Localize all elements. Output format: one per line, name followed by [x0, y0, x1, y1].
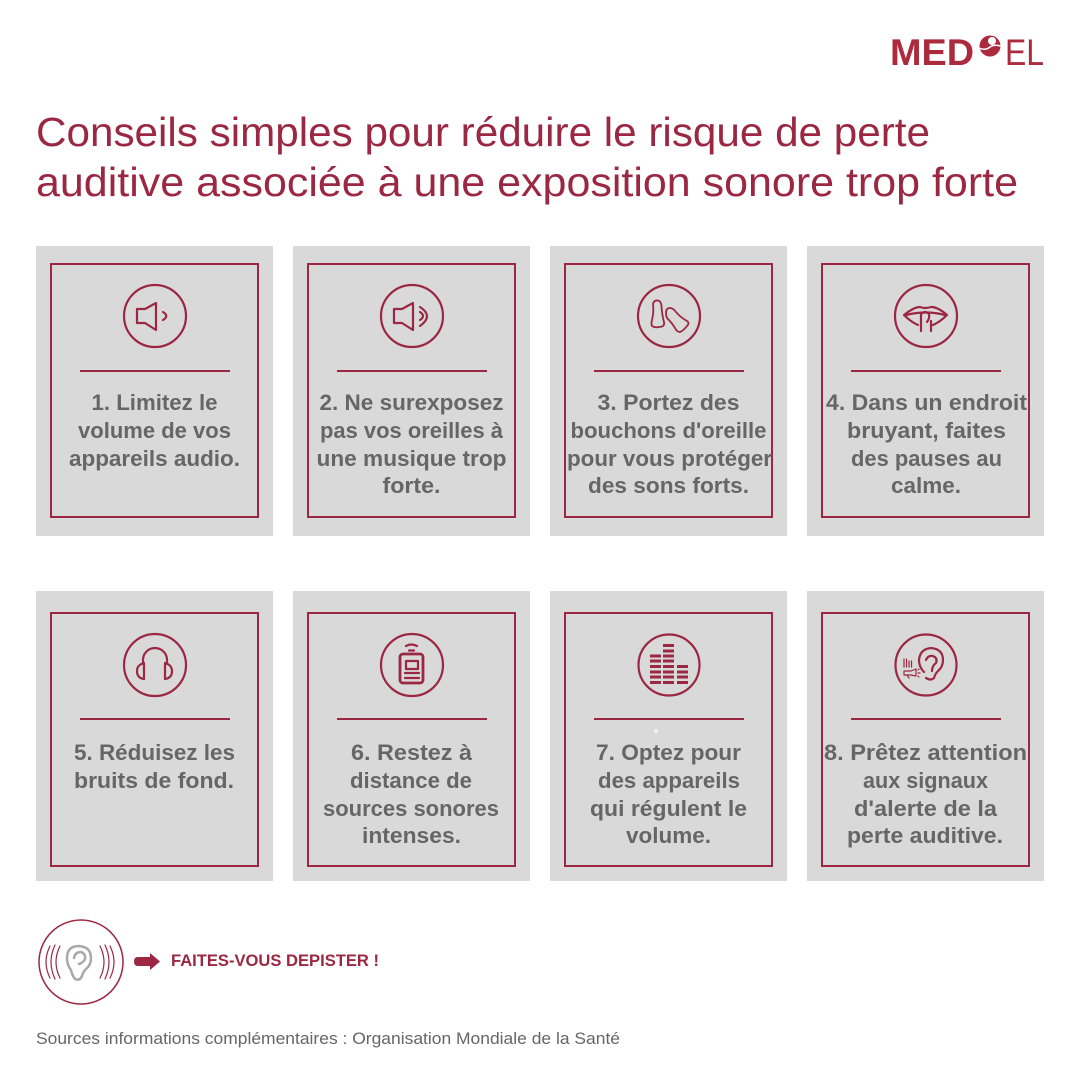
text: tip 3 [567, 390, 772, 498]
icon: ear with sound waves [39, 920, 123, 1004]
text: tip 8: perte auditive. [847, 823, 1003, 848]
text: tip 7 [590, 740, 747, 848]
icon: wireless audio device [381, 634, 443, 696]
arrow [134, 953, 160, 970]
text: tip 8: d'alerte de la [854, 796, 998, 821]
panel: tip 1 [36, 246, 273, 536]
text: tip 6: 6. Restez à [351, 740, 473, 765]
text: tip 3: bouchons d'oreille [570, 418, 766, 443]
text: tip 4 [826, 390, 1028, 498]
text: tip 1: appareils audio. [69, 446, 240, 471]
text: tip 2 [316, 390, 506, 498]
text: tip 2: 2. Ne surexposez [320, 390, 504, 415]
callout: get screened: FAITES-VOUS DEPISTER ! [171, 952, 379, 970]
icon: equalizer [638, 634, 700, 696]
panel: tip 5 [36, 591, 273, 881]
logo: MED-EL [890, 32, 1044, 73]
text: tip 6 [323, 740, 499, 848]
text: tip 2: une musique trop [316, 446, 506, 471]
text: tip 3: pour vous protéger [567, 446, 772, 471]
icon: ear plugs [638, 285, 700, 347]
icon: ear with warning signals [896, 634, 956, 696]
text: tip 1 [69, 390, 240, 471]
text: tip 7: 7. Optez pour [596, 740, 741, 765]
logo: MED-EL: MED [890, 32, 974, 73]
sources: Sources informations complémentaires : Organisation Mondiale de la Santé [36, 1029, 620, 1048]
text: tip 5: 5. Réduisez les [74, 740, 235, 765]
text: tip 8 [824, 740, 1027, 848]
text: tip 7: qui régulent le [590, 796, 747, 821]
panel: tip 3 [550, 246, 787, 536]
panel: tip 2 [293, 246, 530, 536]
title: auditive associée à une exposition sonore trop forte [36, 159, 1018, 205]
panel: tip 8 [807, 591, 1044, 881]
text: tip 5 [74, 740, 235, 793]
text: tip 7: des appareils [598, 768, 740, 793]
text: tip 7: volume. [626, 823, 711, 848]
text: tip 8: 8. Prêtez attention [824, 740, 1027, 765]
icon: high volume speaker [381, 285, 443, 347]
icon: headphones [124, 634, 186, 696]
text: tip 4: calme. [891, 473, 961, 498]
logo: MED-EL: EL [1005, 32, 1044, 73]
text: tip 6: sources sonores [323, 796, 499, 821]
text: tip 2: pas vos oreilles à [320, 418, 504, 443]
small white dot [654, 729, 658, 733]
panel: tip 6 [293, 591, 530, 881]
text: tip 8: aux signaux [863, 768, 989, 793]
text: tip 4: des pauses au [851, 446, 1002, 471]
icon: finger on lips [895, 285, 957, 347]
text: tip 5: bruits de fond. [74, 768, 234, 793]
text: tip 2: forte. [382, 473, 440, 498]
title [36, 109, 1018, 205]
panel: tip 4 [807, 246, 1044, 536]
text: tip 3: 3. Portez des [598, 390, 740, 415]
text: tip 3: des sons forts. [588, 473, 749, 498]
panel: tip 7 [550, 591, 787, 881]
icon: low volume speaker [124, 285, 186, 347]
text: tip 4: 4. Dans un endroit [826, 390, 1028, 415]
text: tip 1: 1. Limitez le [92, 390, 218, 415]
text: tip 6: intenses. [362, 823, 461, 848]
text: tip 6: distance de [350, 768, 472, 793]
title: Conseils simples pour réduire le risque de perte [36, 109, 930, 155]
text: tip 4: bruyant, faites [847, 418, 1006, 443]
text: tip 1: volume de vos [78, 418, 231, 443]
